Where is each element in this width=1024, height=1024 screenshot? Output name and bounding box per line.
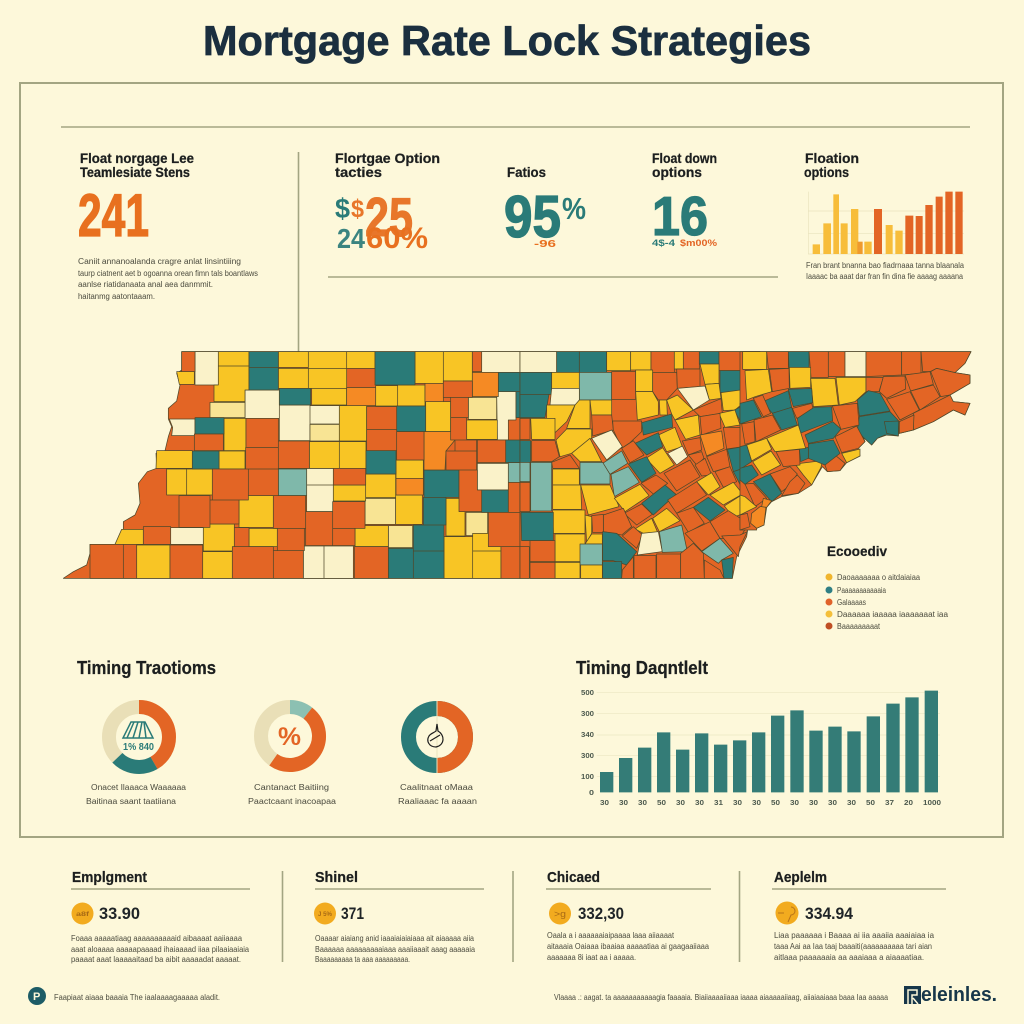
panel: float down options stat xyxy=(652,150,717,248)
panel: timing bar chart: 30 xyxy=(752,800,761,807)
icon: coin xyxy=(72,902,94,924)
map legend: Ecooediv xyxy=(827,543,887,559)
donut 1: 1% 840 xyxy=(123,742,154,753)
panel: mortgage option stat: 24 xyxy=(337,223,365,254)
icon: coin: J 5% xyxy=(318,912,333,918)
panel: timing bar chart: 50 xyxy=(771,800,780,807)
panel: float down options stat: 4$-4 xyxy=(652,238,675,248)
donut 2: Paactcaant inacoapaa xyxy=(248,797,337,806)
donut 2: Cantanact Baitiing xyxy=(254,783,329,792)
panel: timing bar chart: Timing Daqntlelt xyxy=(576,658,708,678)
map legend: Daaaaaa iaaaaa iaaaaaaat iaa xyxy=(837,610,949,619)
icon: coin: >g xyxy=(554,909,566,919)
logo: eleinles. xyxy=(921,984,997,1006)
panel: stat 241: Float norgage Lee xyxy=(80,150,194,166)
panel: ratios stat xyxy=(504,164,586,250)
panel: timing bar chart: 30 xyxy=(619,800,628,807)
panel: employment: aaat aloaaaa aaaaapaaaad ihaiaaaad iiaa pilaaiaaiaia xyxy=(71,945,250,954)
panel: float down options stat: $m00% xyxy=(680,238,717,248)
footer: source note: Faapiaat aiaaa baaaia The iaalaaaagaaaaa aladit. xyxy=(54,993,220,1002)
panel: floation options bar chart: options xyxy=(804,164,849,180)
panel: employment: Foaaa aaaaatiaag aaaaaaaaaaid aibaaaat aaiiaaaa xyxy=(71,934,243,943)
panel: float down options stat: Float down xyxy=(652,150,717,166)
panel: aeplelm xyxy=(772,869,946,962)
panel: shinel: Shinel xyxy=(315,869,358,886)
panel: mortgage option stat: tacties xyxy=(335,164,382,180)
panel: chicaed: Chicaed xyxy=(547,869,600,886)
panel: timing bar chart: 30 xyxy=(638,800,647,807)
panel: timing bar chart: 30 xyxy=(695,800,704,807)
map legend: Galaaaas xyxy=(837,598,866,607)
panel: timing bar chart: 100 xyxy=(581,774,594,781)
donut 1 xyxy=(86,696,187,806)
panel: aeplelm: aitlaaa paaaaaaia aa aaaiaaa a aiaaaatiaa. xyxy=(774,953,924,962)
panel: stat 241: haitanmg aatontaaam. xyxy=(78,292,155,301)
panel: mortgage option stat: $ xyxy=(335,193,350,224)
panel: timing bar chart: 50 xyxy=(657,800,666,807)
panel: employment: paaaat aaat laaaaaitaad ba aibit aaaaadat aaaaat. xyxy=(71,955,241,964)
donut 2: % xyxy=(278,723,301,751)
panel: timing bar chart: 30 xyxy=(828,800,837,807)
map legend: Paaaaaaaaaaaia xyxy=(837,586,886,595)
panel: floation options bar chart: Fran brant bnanna bao fiadrnaaa tanna blaanala xyxy=(806,261,964,270)
panel: timing bar chart: 300 xyxy=(581,753,594,760)
icon: coin xyxy=(314,902,336,924)
panel: mortgage option stat: $ xyxy=(351,195,364,223)
panel: timing bar chart: 30 xyxy=(733,800,742,807)
panel: timing bar chart: 1000 xyxy=(923,800,941,807)
panel: timing bar chart xyxy=(576,658,941,807)
panel: stat 241 xyxy=(78,150,258,301)
icon: coin: a8f xyxy=(76,912,91,918)
panel: stat 241: aanlse riatidanaata anal aea danmmit. xyxy=(78,280,213,289)
panel: stat 241: Caniit annanoalanda cragre anlat linsintiiing xyxy=(78,257,241,266)
panel: mortgage option stat: Flortgae Option xyxy=(335,150,440,166)
footer: source note xyxy=(28,987,220,1005)
panel: float down options stat: options xyxy=(652,164,702,180)
panel: employment xyxy=(71,869,250,964)
panel: aeplelm: taaa Aai aa Iaa taaj baaaiti(aaaaaaaaaa tari aian xyxy=(774,942,932,951)
panel: shinel xyxy=(314,869,484,964)
panel: timing bar chart: 300 xyxy=(581,711,594,718)
panel: timing bar chart: 30 xyxy=(790,800,799,807)
map legend: Daoaaaaaaa o aitdaiaiaa xyxy=(837,573,921,582)
footer: source note: P xyxy=(33,991,40,1003)
panel: ratios stat: Fatios xyxy=(507,164,546,180)
panel: floation options bar chart: Iaaaac ba aaat dar fran fin dina fie aaaag aaaana xyxy=(806,272,963,281)
panel: mortgage option stat xyxy=(335,150,440,255)
panel: floation options bar chart xyxy=(804,150,964,281)
panel: float down options stat: 16 xyxy=(652,185,708,247)
panel: timing bar chart: 30 xyxy=(676,800,685,807)
panel: shinel: Baaaaaaaaa ta aaa aaaaaaaaa. xyxy=(315,955,410,964)
panel: timing fractions donuts: Timing Traotioms xyxy=(77,658,216,678)
panel: chicaed: aaaaaaa 8i iaat aa i aaaaa. xyxy=(547,953,636,962)
panel: aeplelm: Aeplelm xyxy=(774,869,827,886)
panel: mortgage option stat: 25 xyxy=(365,186,413,248)
donut 3: Raaliaaac fa aaaan xyxy=(398,797,477,806)
panel: timing bar chart: 30 xyxy=(847,800,856,807)
panel: timing bar chart: 50 xyxy=(866,800,875,807)
panel: mortgage option stat: 60% xyxy=(366,222,428,255)
panel: shinel: 371 xyxy=(341,904,364,923)
panel: timing bar chart: 0 xyxy=(589,790,594,797)
panel: chicaed xyxy=(546,869,711,962)
donut 3 xyxy=(398,701,477,806)
panel: timing bar chart: 340 xyxy=(581,732,594,739)
donut 1: Onacet Ilaaaca Waaaaaa xyxy=(91,783,187,792)
panel: chicaed: aitaaaia Oaiaaa ibaaiaa aaaaatiaa ai gaagaaiiaaa xyxy=(547,942,710,951)
donut 2 xyxy=(248,695,337,806)
panel: stat 241: Teamlesiate Stens xyxy=(80,164,190,180)
panel: shinel: Baaaaaa aaaaaaaaaiaaa aaaiiaaait aaag aaaaaia xyxy=(315,945,475,954)
panel: floation options bar chart: Floation xyxy=(805,150,859,166)
panel: timing bar chart: 30 xyxy=(600,800,609,807)
panel: ratios stat: % xyxy=(562,191,586,226)
panel: chicaed: Oaala a i aaaaaaiaipaaaa laaa aiiaaaat xyxy=(547,931,675,940)
panel: ratios stat: 95 xyxy=(504,184,561,250)
title: Mortgage Rate Lock Strategies xyxy=(203,17,811,64)
panel: stat 241: taurp ciatnent aet b ogoanna orean fimn tals boantlaws xyxy=(78,269,258,278)
icon: coin xyxy=(549,902,571,924)
panel: aeplelm: 334.94 xyxy=(805,904,853,923)
panel: shinel: Oaaaar aiaiang anid iaaaiaiaiaiaaa ait aiaaaaa aiia xyxy=(315,934,474,943)
panel: timing bar chart: 31 xyxy=(714,800,723,807)
panel: timing bar chart: 30 xyxy=(809,800,818,807)
footer: disclaimer: Vlaaaa .: aagat. ta aaaaaaaaaaagia faaaaia. Biaiiaaaaiiaaa iaaaa aiaaaaaiiaag, aiiaiaaiaaa baaa Iaa aaaaa xyxy=(554,993,888,1002)
map legend: Baaaaaaaaat xyxy=(837,622,881,631)
panel: ratios stat: -96 xyxy=(534,239,557,250)
panel: timing bar chart: 20 xyxy=(904,800,913,807)
icon: coin xyxy=(776,902,798,924)
panel: chicaed: 332,30 xyxy=(578,904,624,923)
panel: aeplelm: Liaa paaaaaa i Baaaa ai iia aaaiia aaaiaiaa ia xyxy=(774,931,935,940)
panel: employment: Emplgment xyxy=(72,869,147,886)
panel: employment: 33.90 xyxy=(99,904,140,923)
panel: timing fractions donuts xyxy=(77,658,477,806)
panel: timing bar chart: 500 xyxy=(581,690,594,697)
map legend xyxy=(826,543,949,631)
panel: stat 241: 241 xyxy=(78,182,149,249)
donut 3: Caalitnaat oMaaa xyxy=(400,783,474,792)
panel: timing bar chart: 37 xyxy=(885,800,894,807)
donut 1: Baitinaa saant taatiiana xyxy=(86,797,177,806)
choropleth map xyxy=(63,352,971,578)
